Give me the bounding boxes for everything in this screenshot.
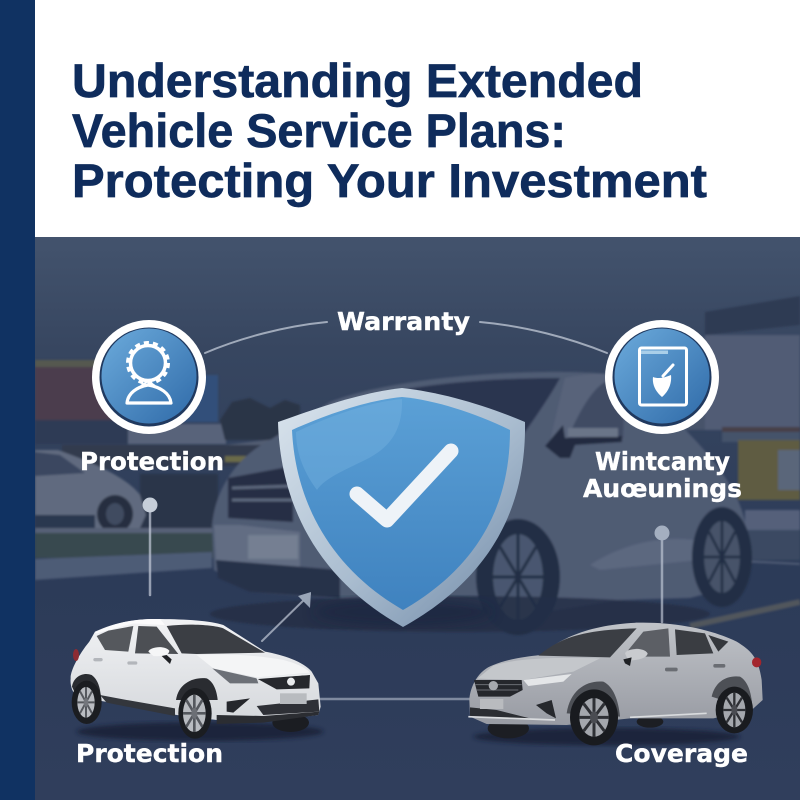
background scene: dealership and parked vehicle xyxy=(35,237,800,800)
title: Vehicle Service Plans: xyxy=(72,104,566,157)
label: Protection (lower): Protection xyxy=(76,739,223,768)
title: Understanding Extended xyxy=(72,54,643,107)
connector arrowhead xyxy=(298,592,311,608)
label: Wintcanty Auœunings: Auœunings xyxy=(583,474,742,503)
car: white hatchback, left xyxy=(71,619,323,741)
label: Wintcanty Auœunings xyxy=(583,447,742,503)
label: Coverage: Coverage xyxy=(615,739,748,768)
connector node: right xyxy=(654,526,670,540)
label: Warranty: Warranty xyxy=(337,307,470,336)
icon: protection badge xyxy=(92,320,206,434)
title: Protecting Your Investment xyxy=(72,154,707,207)
central shield with check mark xyxy=(278,388,525,627)
icon: warranty document badge xyxy=(605,320,719,434)
connector node: left xyxy=(142,498,158,512)
label: Wintcanty Auœunings: Wintcanty xyxy=(595,447,730,476)
car: silver crossover, right xyxy=(468,623,763,745)
header background xyxy=(0,0,800,237)
left navy bar xyxy=(0,0,35,800)
connector lines xyxy=(150,322,662,699)
title xyxy=(72,54,707,207)
label: Protection (upper): Protection xyxy=(80,447,224,476)
